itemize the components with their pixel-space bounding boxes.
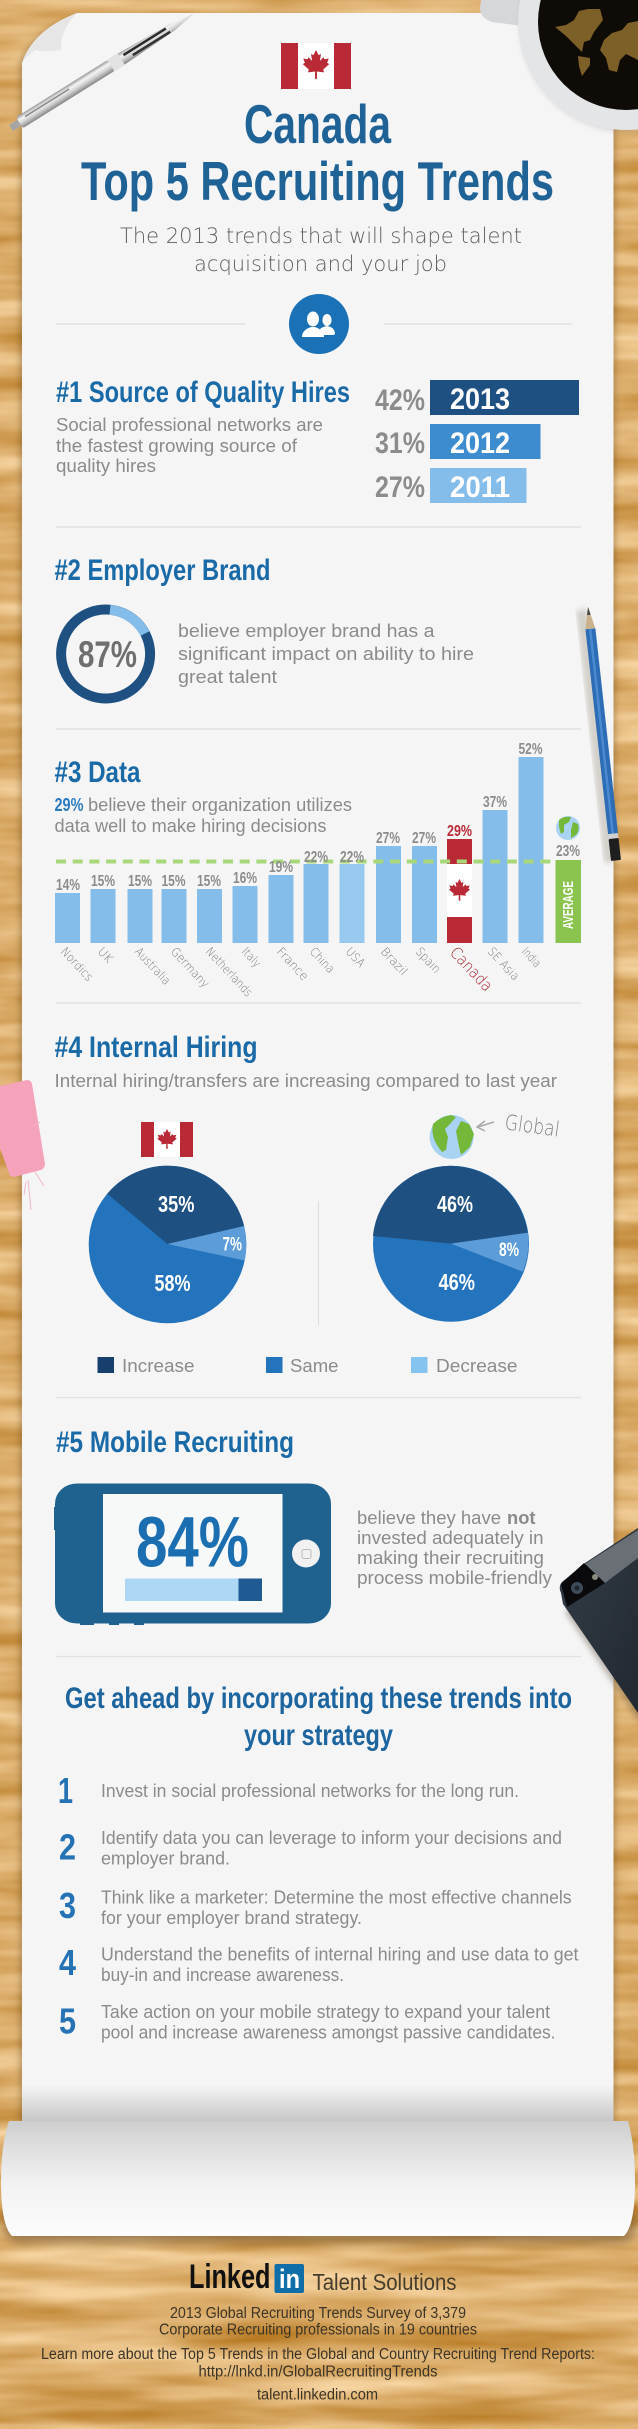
body text 1: quality hires	[56, 455, 156, 476]
bar chart: yearly trend: 27%	[375, 471, 425, 504]
pie chart: Global	[373, 1166, 529, 1322]
item 4: 4	[59, 1942, 76, 1983]
country labels: Germany	[168, 944, 212, 991]
pie chart: Global: 8%	[499, 1240, 519, 1261]
body text 5: believe they have	[357, 1507, 501, 1528]
item 2	[59, 1826, 562, 1868]
value labels: 22%	[304, 849, 328, 866]
country labels: China	[307, 944, 338, 976]
country labels: Spain	[413, 944, 444, 976]
body text 2: believe employer brand has a	[178, 620, 435, 641]
section 3: data	[54, 741, 581, 999]
country labels: Italy	[239, 944, 264, 970]
value labels: 15%	[91, 873, 115, 890]
roll shadow	[4, 2205, 636, 2243]
body text 1	[56, 414, 323, 476]
heading 5: #5 Mobile Recruiting	[56, 1426, 294, 1459]
country labels: Brazil	[378, 944, 411, 978]
title: Canada	[244, 93, 391, 155]
value labels: 27%	[376, 830, 400, 847]
pie chart: Global: 46%	[437, 1191, 473, 1217]
flag: Canada small	[141, 1122, 193, 1157]
pen	[7, 8, 198, 134]
body text 5: invested adequately in	[357, 1527, 544, 1548]
country labels: USA	[343, 944, 368, 970]
global annotation: Global	[503, 1110, 561, 1142]
legend: Increase	[122, 1355, 194, 1376]
body text 4: Internal hiring/transfers are increasing compared to last year	[54, 1070, 557, 1091]
call to action heading: your strategy	[244, 1719, 393, 1752]
icon: globe	[430, 1115, 474, 1159]
country labels: SE Asia	[485, 944, 522, 983]
bar chart: yearly trend: 2012	[450, 427, 510, 460]
body text 3: 29%	[54, 794, 84, 815]
pie chart: Canada: 35%	[158, 1191, 194, 1217]
value labels: 37%	[483, 794, 507, 811]
pie chart: Canada: 58%	[154, 1270, 190, 1296]
item 4: buy-in and increase awareness.	[101, 1964, 344, 1985]
value labels: 19%	[269, 859, 293, 876]
subtitle: The 2013 trends that will shape talent	[120, 224, 522, 248]
average bar: AVERAGE	[560, 881, 577, 929]
LinkedIn logo: Talent Solutions	[312, 2269, 456, 2295]
average bar	[556, 860, 581, 943]
item 3	[59, 1885, 572, 1928]
body text 1: Social professional networks are	[56, 414, 323, 435]
bar chart: yearly trend: 2013	[450, 383, 510, 416]
footer text: Corporate Recruiting professionals in 19 countries	[159, 2322, 477, 2338]
country labels: India	[519, 944, 544, 970]
item 4	[59, 1942, 578, 1985]
coffee cup	[480, 0, 638, 132]
item 1: 1	[58, 1770, 73, 1811]
global annotation	[477, 1110, 561, 1142]
heading 3: #3 Data	[54, 756, 141, 789]
footer text: talent.linkedin.com	[257, 2386, 378, 2404]
pencil	[576, 606, 621, 863]
item 5	[59, 2000, 556, 2042]
body text 3	[54, 794, 352, 836]
item 2: Identify data you can leverage to inform your decisions and	[101, 1827, 562, 1848]
footer text: Learn more about the Top 5 Trends in the Global and Country Recruiting Trend Reports:	[41, 2346, 595, 2363]
folded paper corner	[22, 13, 77, 63]
numbered list	[58, 1770, 578, 2042]
value labels: 52%	[518, 741, 542, 758]
item 5: pool and increase awareness amongst passive candidates.	[101, 2022, 556, 2042]
item 1	[58, 1770, 519, 1811]
item 5: 5	[59, 2000, 76, 2042]
paper roll	[1, 2121, 635, 2236]
item 2: 2	[59, 1826, 76, 1868]
donut chart 87%	[61, 610, 150, 698]
section 5: mobile recruiting	[54, 1426, 553, 1625]
footer text: http://lnkd.in/GlobalRecruitingTrends	[198, 2364, 438, 2380]
donut chart 87%: 87%	[78, 634, 137, 675]
icon: small globe	[556, 816, 580, 840]
value labels	[56, 741, 580, 894]
heading 2: #2 Employer Brand	[54, 554, 270, 587]
item 4: Understand the benefits of internal hiring and use data to get	[101, 1944, 578, 1964]
footer text: 2013 Global Recruiting Trends Survey of 3,379	[170, 2305, 466, 2322]
body text 2: great talent	[178, 666, 277, 687]
value labels: 15%	[197, 873, 221, 890]
body text 1: the fastest growing source of	[56, 435, 298, 456]
call to action heading	[65, 1682, 572, 1752]
item 1: Invest in social professional networks for the long run.	[101, 1780, 519, 1801]
pie chart: Canada	[89, 1166, 246, 1323]
section 4: internal hiring	[54, 1031, 561, 1376]
footer	[41, 2258, 595, 2404]
value labels: 14%	[56, 877, 80, 894]
bar chart: countries	[55, 741, 581, 999]
bar chart: yearly trend	[375, 380, 579, 504]
legend: Same	[290, 1355, 338, 1376]
value labels: 22%	[340, 849, 364, 866]
item 3: Think like a marketer: Determine the most effective channels	[101, 1886, 572, 1908]
bar chart: yearly trend: 31%	[375, 427, 425, 460]
LinkedIn logo	[189, 2258, 456, 2296]
item 2: employer brand.	[101, 1848, 230, 1868]
value labels: 15%	[162, 873, 186, 890]
LinkedIn logo: in	[279, 2264, 300, 2294]
body text 2	[178, 620, 474, 687]
bar chart: yearly trend: 42%	[375, 384, 425, 417]
value labels: 16%	[233, 870, 257, 887]
body text 3: data well to make hiring decisions	[54, 815, 326, 836]
pie chart: Global: 46%	[438, 1269, 475, 1295]
Canada flag bar	[447, 839, 472, 943]
paper shadow above roll	[22, 2085, 614, 2121]
phone graphic	[54, 1484, 331, 1625]
bar chart: yearly trend: 2011	[450, 471, 510, 504]
world map in coffee	[555, 9, 638, 76]
heading 1: #1 Source of Quality Hires	[56, 376, 350, 409]
iPhone photo	[560, 1528, 638, 1728]
country labels: Nordics	[58, 944, 96, 984]
flag: Canada header	[281, 43, 351, 89]
country labels: UK	[95, 944, 116, 966]
item 3: 3	[59, 1885, 76, 1926]
body text 3: believe their organization utilizes	[88, 794, 352, 815]
item 5: Take action on your mobile strategy to expand your talent	[101, 2001, 550, 2022]
eraser	[0, 1080, 45, 1210]
cup handle	[480, 0, 530, 27]
LinkedIn logo: Linked	[189, 2258, 270, 2296]
value labels: 23%	[556, 843, 580, 860]
body text 5: process mobile-friendly	[357, 1567, 553, 1588]
country labels: Australia	[132, 944, 173, 988]
country labels: Canada	[446, 943, 497, 995]
footer text	[41, 2305, 595, 2404]
heading 4: #4 Internal Hiring	[54, 1031, 258, 1064]
country labels: France	[274, 944, 311, 983]
value labels: 29%	[447, 823, 472, 840]
legend	[98, 1355, 518, 1376]
body text 5: not	[507, 1507, 536, 1528]
legend: Decrease	[436, 1355, 518, 1376]
item 3: for your employer brand strategy.	[101, 1907, 362, 1928]
country labels: Netherlands	[203, 944, 255, 999]
section 1: source of quality hires	[56, 376, 579, 504]
phone graphic: 84%	[136, 1504, 249, 1582]
icon: people badge	[289, 294, 349, 354]
title	[81, 93, 554, 212]
body text 5	[357, 1507, 553, 1588]
country labels	[58, 943, 544, 999]
value labels: 15%	[128, 873, 152, 890]
pie chart: Canada: 7%	[222, 1234, 242, 1256]
body text 2: significant impact on ability to hire	[178, 643, 474, 664]
subtitle: acquisition and your job	[194, 252, 447, 276]
subtitle	[120, 224, 522, 276]
section 2: employer brand	[54, 554, 474, 698]
body text 5: making their recruiting	[357, 1547, 544, 1568]
value labels: 27%	[412, 830, 436, 847]
